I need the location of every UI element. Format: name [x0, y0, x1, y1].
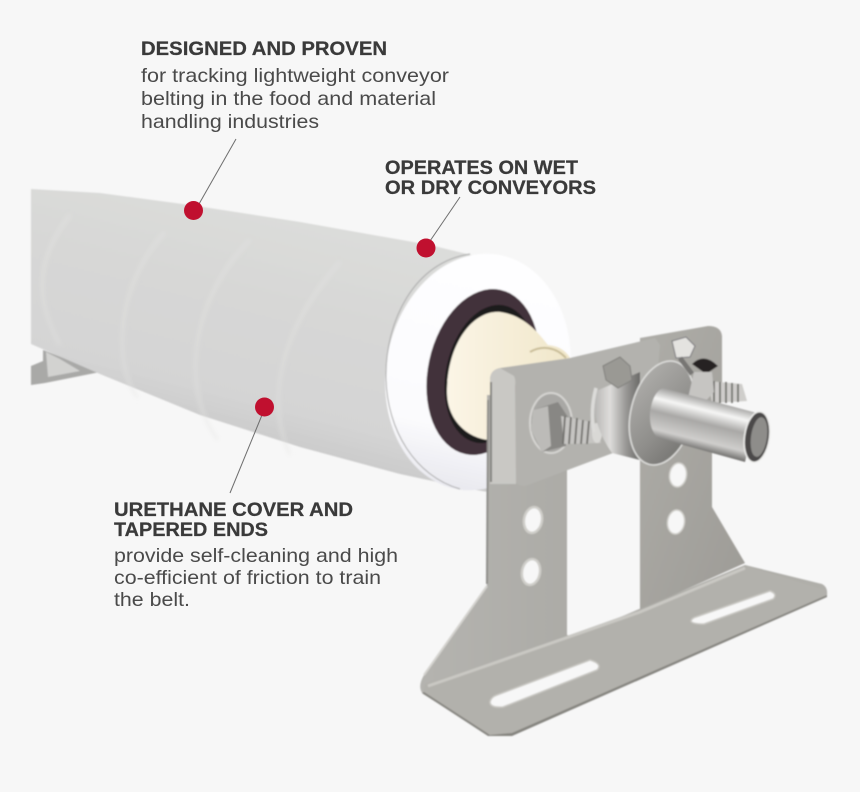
marker dot — [184, 201, 203, 220]
flange collar — [619, 354, 705, 472]
urethane roller cover — [31, 189, 500, 494]
gusset highlight edge — [424, 586, 487, 675]
rear bracket plate — [640, 326, 745, 610]
base plate fold — [423, 566, 825, 735]
marker dot — [255, 398, 274, 416]
leader line — [430, 197, 460, 241]
callout: urethane cover — [114, 398, 398, 611]
heading: URETHANE COVER AND — [114, 500, 353, 521]
dark bearing ring — [412, 278, 554, 466]
front bracket holes — [520, 506, 544, 586]
callout: designed and proven — [141, 39, 450, 220]
description: co-efficient of friction to train — [114, 567, 381, 589]
leader line — [230, 415, 262, 493]
cream inner hub — [447, 312, 572, 440]
photo: roller assembly — [31, 189, 827, 736]
small hex bolt on hub — [603, 357, 632, 388]
rear bracket holes — [666, 462, 688, 535]
heading: OPERATES ON WET — [385, 158, 578, 179]
welded hub housing — [594, 372, 640, 460]
description: for tracking lightweight conveyor — [141, 65, 450, 87]
callout: wet or dry conveyors — [385, 158, 596, 258]
marker dot — [416, 238, 436, 258]
description: handling industries — [141, 111, 319, 133]
leg shadow edge — [487, 400, 488, 584]
description: provide self-cleaning and high — [114, 545, 398, 567]
left mounting bracket — [31, 350, 100, 385]
description: belting in the food and material — [141, 88, 436, 110]
leader line — [199, 139, 236, 204]
heading: DESIGNED AND PROVEN — [141, 39, 387, 60]
front bracket leg and base plate — [420, 395, 827, 736]
description: the belt. — [114, 589, 190, 611]
heading: OR DRY CONVEYORS — [385, 178, 596, 199]
bolt: front nut and thread — [530, 393, 602, 453]
stainless shaft — [650, 388, 773, 464]
heading: TAPERED ENDS — [114, 520, 268, 541]
base plate slots — [490, 591, 775, 707]
top bolts and clamp — [672, 337, 747, 405]
front bracket top flange — [490, 338, 660, 486]
white tapered end cap — [367, 239, 589, 505]
